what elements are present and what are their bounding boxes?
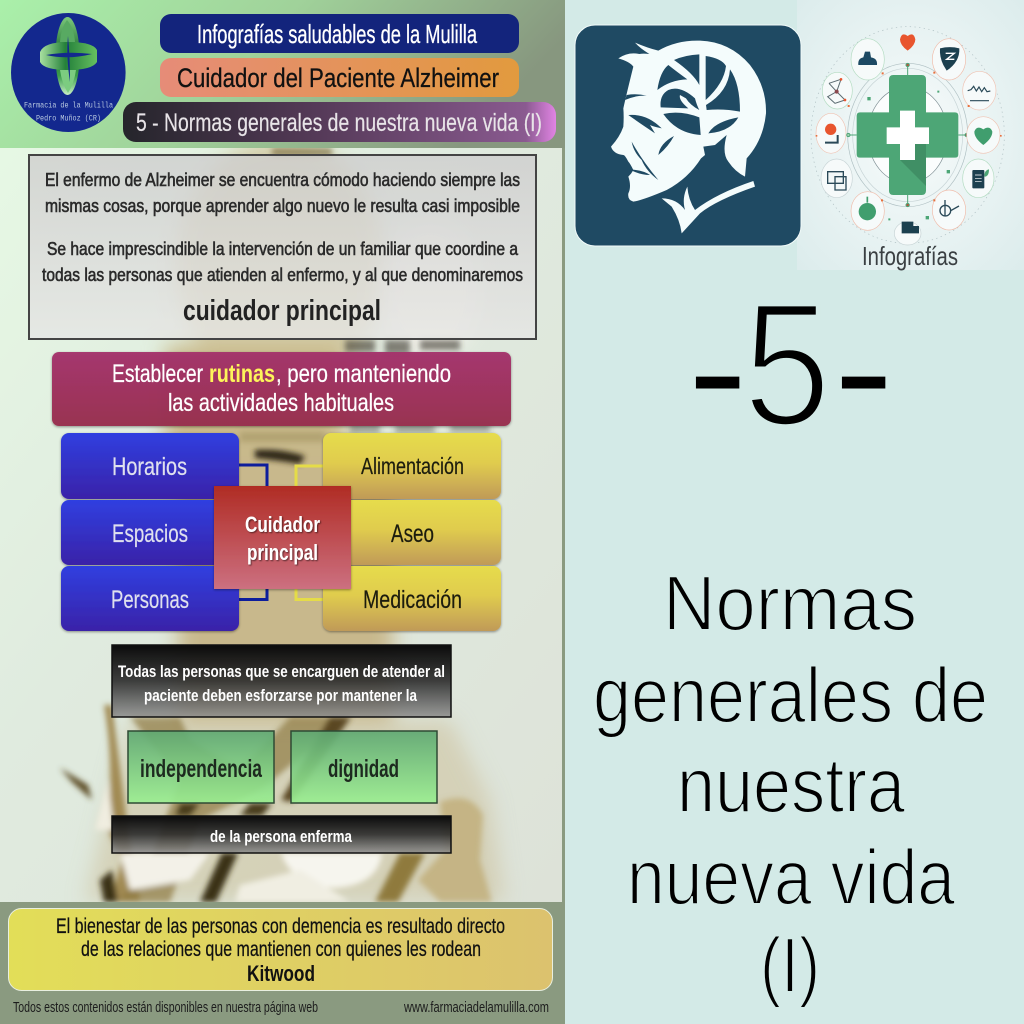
value box: dignidad: dignidad xyxy=(328,755,399,783)
white cross xyxy=(887,111,929,160)
footer url: www.farmaciadelamulilla.com xyxy=(403,999,549,1016)
connector lines: yellow xyxy=(296,466,323,600)
intro text box: mismas cosas, porque aprender algo nuevo le resulta casi imposible xyxy=(45,196,520,216)
big number xyxy=(686,262,895,474)
concentric rings xyxy=(811,27,1004,243)
routines banner: las actividades habituales xyxy=(168,389,394,417)
box: Horarios: Horarios xyxy=(112,453,187,481)
black box: de la persona enferma xyxy=(112,816,451,853)
routines banner: rutinas xyxy=(209,360,275,388)
icon: infografías medical circle xyxy=(797,0,1024,271)
black box: intro to values xyxy=(112,645,451,717)
title line 3: nuestra xyxy=(677,741,906,829)
icon: truck xyxy=(894,222,921,245)
box: Aseo: Aseo xyxy=(391,520,434,548)
icon: screens xyxy=(821,159,852,198)
activity boxes: blue column xyxy=(61,433,239,631)
central box: Cuidador principal: principal xyxy=(247,540,318,565)
activity boxes: yellow column xyxy=(323,433,501,631)
title pill: 5 - Normas generales xyxy=(123,102,556,142)
box: Alimentación xyxy=(323,433,501,499)
cross shadow xyxy=(900,144,926,186)
logo: Farmacia de la Mulilla: Pedro Muñoz (CR) xyxy=(36,114,101,124)
logo: Farmacia de la Mulilla xyxy=(11,13,126,132)
intro text box: El enfermo de Alzheimer se encuentra cómodo haciendo siempre las xyxy=(45,170,520,190)
footer note: Todos estos contenidos están disponibles en nuestra página web xyxy=(13,999,318,1016)
central box: Cuidador principal: Cuidador xyxy=(245,512,320,537)
routines banner xyxy=(52,352,511,426)
intro text box: cuidador principal xyxy=(183,295,381,327)
quote box: El bienestar de las personas con demencia es resultado directo xyxy=(56,915,505,938)
title line 5: (I) xyxy=(760,921,820,1009)
left dash: - xyxy=(686,262,749,474)
value box: dignidad xyxy=(291,731,437,803)
icon: wave xyxy=(963,71,996,110)
box: Medicación: Medicación xyxy=(363,586,462,614)
title line 4: nueva vida xyxy=(627,833,956,921)
left panel background with sepia portrait xyxy=(0,140,563,902)
orange dots xyxy=(816,72,1002,201)
icon: network nodes xyxy=(822,72,852,109)
label: Infografías: Infografías xyxy=(862,241,958,271)
icon: wheelchair xyxy=(932,190,966,230)
title pill: Cuidador del Paciente Alzheimer: Cuidador del Paciente Alzheimer xyxy=(177,63,499,93)
big title xyxy=(593,559,988,1009)
quote box xyxy=(8,908,552,990)
box: Horarios xyxy=(61,433,239,499)
right panel background xyxy=(563,0,1024,1024)
box: Alimentación: Alimentación xyxy=(361,453,464,479)
box: Personas: Personas xyxy=(111,586,189,614)
right dash: - xyxy=(832,262,895,474)
icon: alzheimer head logo xyxy=(575,25,801,246)
title pill: Cuidador del Paciente Alzheimer xyxy=(160,58,519,97)
box: Personas xyxy=(61,566,239,631)
green dots xyxy=(867,91,950,220)
intro text box: Se hace imprescindible la intervención de un familiar que coordine a xyxy=(47,239,519,259)
green cross xyxy=(857,75,958,195)
value box: independencia xyxy=(128,731,274,803)
box: Aseo xyxy=(323,500,501,565)
icon: cloud circle xyxy=(851,39,884,80)
footer band xyxy=(0,902,565,1024)
black box: intro to values: paciente deben esforzarse por mantener la xyxy=(144,686,417,705)
black box: intro to values: Todas las personas que se encarguen de atender al xyxy=(118,662,445,681)
box: Espacios: Espacios xyxy=(112,520,188,548)
logo: Farmacia de la Mulilla: Farmacia de la Mulilla xyxy=(24,100,113,110)
intro text box: todas las personas que atienden al enfermo, y al que denominaremos xyxy=(42,265,523,285)
routines banner: , pero manteniendo xyxy=(276,360,451,388)
intro text box xyxy=(29,155,536,339)
connector nodes xyxy=(847,63,968,207)
title line 1: Normas xyxy=(663,559,917,647)
icon: green heart xyxy=(967,117,1000,153)
quote box: Kitwood xyxy=(247,961,315,986)
icon: clipboard xyxy=(963,159,994,198)
icon: dark shield xyxy=(932,39,966,80)
icon: red heart xyxy=(900,34,915,51)
digit 5: 5 xyxy=(743,267,831,463)
title pill: Infografías saludables: Infografías saludables de la Mulilla xyxy=(197,19,477,49)
black box: de la persona enferma: de la persona enferma xyxy=(210,827,352,846)
divider strip xyxy=(562,148,565,902)
title pill: 5 - Normas generales: 5 - Normas generales de nuestra nueva vida (I) xyxy=(136,109,542,137)
box: Espacios xyxy=(61,500,239,565)
header band xyxy=(0,0,565,148)
value box: independencia: independencia xyxy=(140,755,263,783)
central box: Cuidador principal xyxy=(214,486,351,589)
title pill: Infografías saludables xyxy=(160,14,519,53)
icon: red dot pad xyxy=(816,113,846,153)
routines banner: Establecer xyxy=(112,360,203,388)
connector lines: blue xyxy=(239,465,267,600)
box: Medicación xyxy=(323,566,501,631)
quote box: de las relaciones que mantienen con quienes les rodean xyxy=(81,938,481,961)
icon: green apple xyxy=(851,192,884,230)
